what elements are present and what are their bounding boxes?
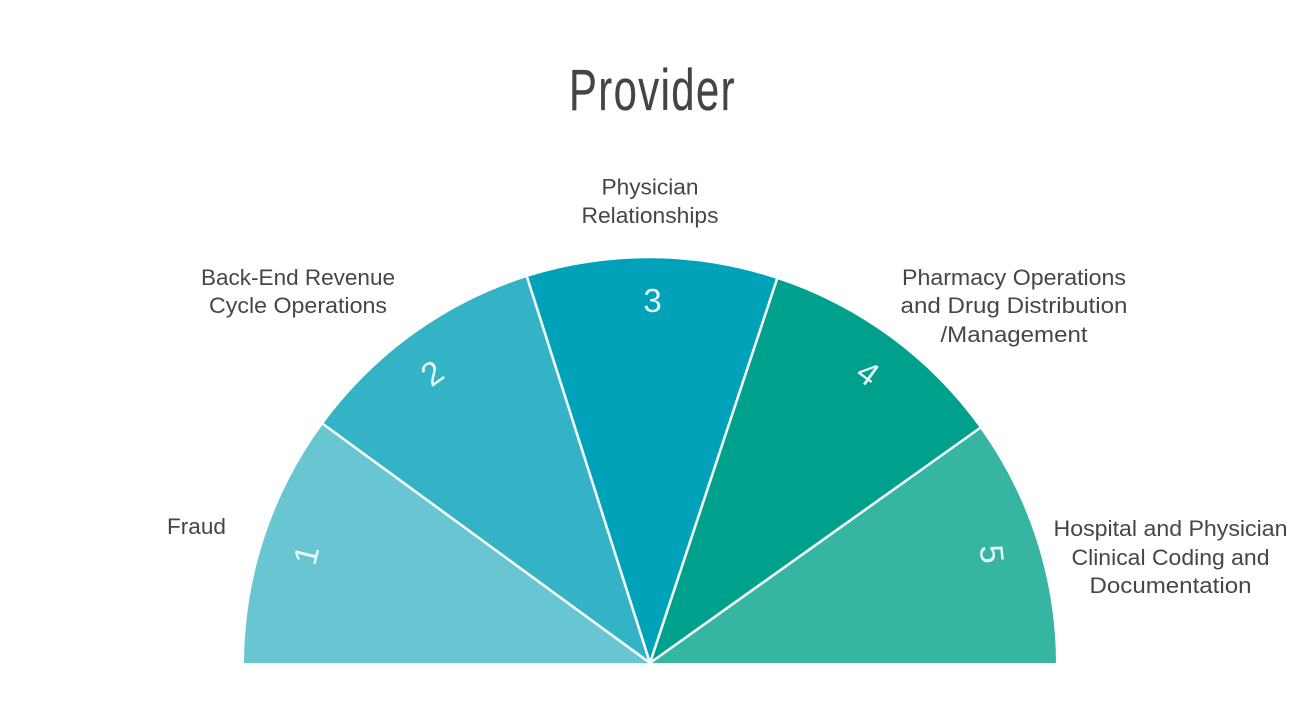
label: Hospital and Physician Clinical Coding and Documentation: Hospital and Physician	[1054, 516, 1288, 541]
label: Hospital and Physician Clinical Coding and Documentation	[1054, 516, 1288, 598]
number 1: 1	[286, 542, 326, 568]
label: Pharmacy Operations and Drug Distribution /Management	[900, 265, 1128, 347]
label: Pharmacy Operations and Drug Distribution /Management: and Drug Distribution	[900, 293, 1128, 318]
label: Physician Relationships: Relationships	[582, 203, 718, 228]
label: Physician Relationships: Physician	[602, 174, 698, 200]
title: Provider	[569, 57, 736, 123]
number 4: 4	[850, 353, 886, 393]
label: Hospital and Physician Clinical Coding and Documentation: Clinical Coding and	[1072, 545, 1270, 570]
number 3: 3	[643, 282, 662, 319]
segment 5	[650, 428, 1056, 663]
label: Pharmacy Operations and Drug Distribution /Management: Pharmacy Operations	[902, 265, 1126, 290]
label: Back-End Revenue Cycle Operations: Back-End Revenue	[201, 265, 395, 290]
semicircle chart	[244, 258, 1056, 663]
label: Fraud: Fraud	[167, 514, 226, 539]
segment 3	[527, 258, 777, 663]
number 5: 5	[973, 543, 1011, 565]
number 2: 2	[414, 353, 450, 393]
label: Back-End Revenue Cycle Operations: Cycle Operations	[209, 293, 387, 318]
segment 1	[244, 424, 650, 663]
segment 4	[650, 279, 980, 663]
segment 2	[323, 277, 650, 663]
label: Hospital and Physician Clinical Coding and Documentation: Documentation	[1090, 573, 1252, 598]
label: Back-End Revenue Cycle Operations	[201, 265, 395, 318]
label: Pharmacy Operations and Drug Distribution /Management: /Management	[940, 322, 1088, 347]
label: Physician Relationships	[582, 174, 718, 228]
